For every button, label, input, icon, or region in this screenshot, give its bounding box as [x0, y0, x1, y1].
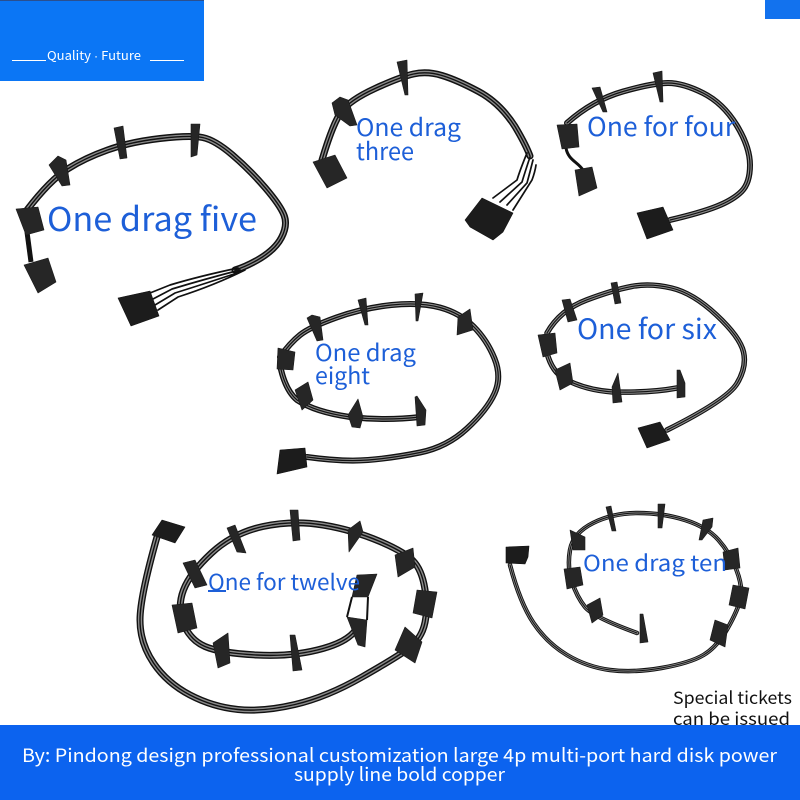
footer bar: [0, 725, 800, 800]
product: one drag ten cable: [506, 504, 749, 671]
product: one for four cable: [557, 71, 750, 239]
banner tagline: Quality · Future: [47, 46, 141, 64]
product: one drag five cable: [16, 124, 286, 326]
note: special tickets: [673, 684, 792, 730]
label underline mark: [208, 590, 226, 592]
footer text: By: Pindong design professional customization large 4p multi-port hard disk power: [22, 742, 778, 768]
label: one drag ten: One drag ten: [583, 546, 727, 578]
note: special tickets: can be issued: [673, 705, 790, 730]
product: one for twelve cable: [140, 510, 437, 710]
footer text: [22, 742, 778, 787]
product: one drag eight cable: [277, 293, 498, 474]
label: one drag eight: eight: [315, 357, 370, 391]
label: one for four: One for four: [587, 107, 736, 144]
label: one drag three: [356, 108, 461, 167]
product: one drag three cable: [313, 60, 536, 240]
label: one drag eight: [315, 334, 416, 391]
label: one drag five: One drag five: [47, 193, 257, 241]
label: one drag eight: One drag: [315, 334, 416, 368]
note: special tickets: Special tickets: [673, 684, 792, 709]
badge: top-right blue square: [765, 0, 800, 19]
label: one drag three: three: [356, 132, 414, 167]
label: one for twelve: One for twelve: [208, 565, 360, 597]
footer text: supply line bold copper: [294, 761, 506, 787]
label: one for six: One for six: [577, 308, 717, 348]
product: one for six cable: [538, 282, 744, 448]
top-left banner: [0, 0, 204, 81]
label: one drag three: One drag: [356, 108, 461, 143]
